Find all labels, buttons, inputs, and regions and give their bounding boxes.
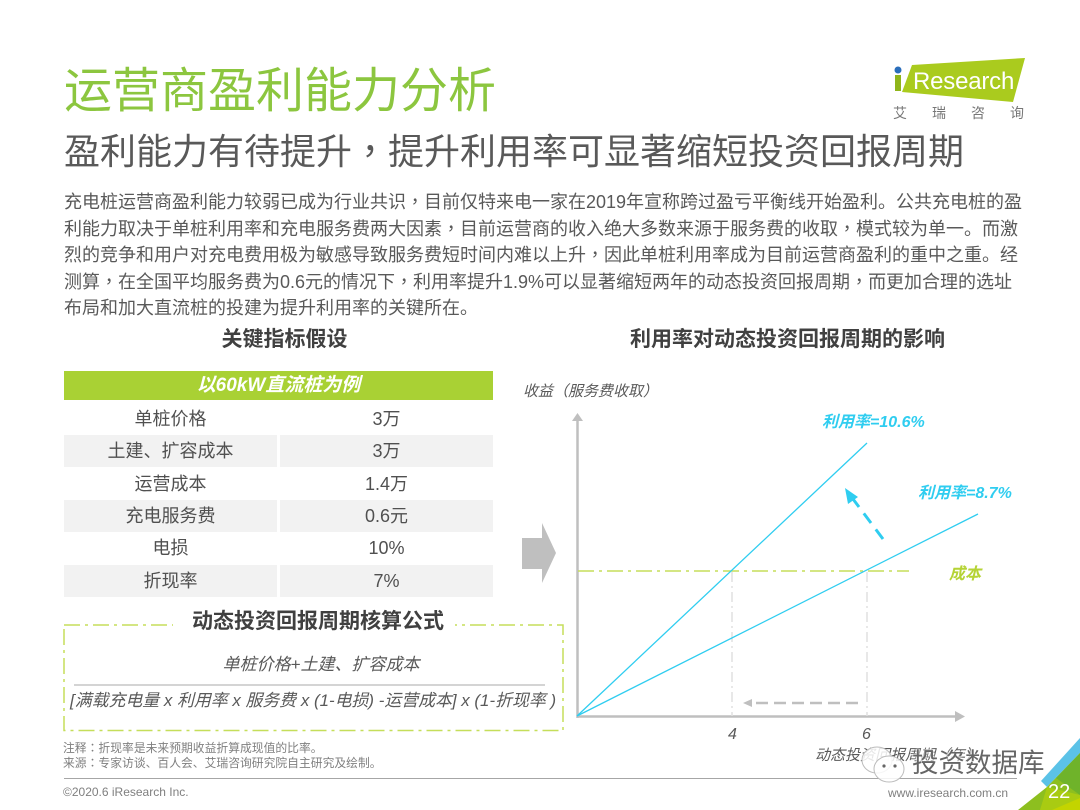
intro text block: 烈的竞争和用户对充电费用极为敏感导致服务费短时间内难以上升，因此单桩利用率成为目前运营商盈利的重中之重。经 [64, 245, 1018, 265]
table header [64, 371, 493, 400]
table: key assumptions: 3万 [372, 441, 400, 461]
label: 8.7%: 利用率=8.7% [918, 485, 1012, 502]
watermark text: 投资数据库 [912, 748, 1044, 778]
label: cost: 成本 [949, 566, 981, 583]
heading: chart title: 利用率对动态投资回报周期的影响 [630, 328, 945, 351]
y axis [572, 413, 583, 718]
tick 6: 6 [862, 726, 871, 743]
intro text block [64, 192, 1022, 318]
table header: 以60kW直流桩为例 [197, 375, 360, 396]
formula denominator: [满载充电量 x 利用率 x 服务费 x (1-电损) -运营成本] x (1-折现率 ) [70, 691, 556, 710]
notes [63, 741, 382, 770]
footer rule [64, 778, 1017, 779]
formula numerator: 单桩价格+土建、扩容成本 [223, 655, 419, 674]
table: key assumptions: 折现率 [144, 571, 198, 591]
corner decoration [1018, 738, 1080, 810]
line: 10.6% [577, 443, 867, 716]
guide lines [732, 572, 867, 716]
logo: iResearch [893, 58, 1049, 121]
heading: key assumptions: 关键指标假设 [222, 328, 348, 351]
table: key assumptions: 1.4万 [365, 474, 408, 494]
arrow: big grey [522, 523, 556, 583]
table: key assumptions: 7% [373, 571, 400, 591]
line: 8.7% [577, 514, 978, 716]
formula heading: 动态投资回报周期核算公式 [192, 610, 444, 633]
table: key assumptions: 3万 [372, 409, 400, 429]
page number: 22 [1048, 781, 1070, 803]
url: www.iresearch.com.cn [888, 786, 1008, 800]
subtitle: 盈利能力有待提升，提升利用率可显著缩短投资回报周期 [64, 131, 964, 172]
logo: iResearch: Research [913, 68, 1014, 95]
tick 4: 4 [728, 726, 737, 743]
table: key assumptions: 电损 [152, 538, 188, 558]
arrow: dashed cyan [845, 488, 883, 539]
table: key assumptions: 单桩价格 [134, 409, 206, 429]
intro text block: 充电桩运营商盈利能力较弱已成为行业共识，目前仅特来电一家在2019年宣称跨过盈亏平衡线开始盈利。公共充电桩的盈 [64, 192, 1022, 212]
label: 10.6%: 利用率=10.6% [822, 414, 925, 431]
chart: utilization vs payback [572, 413, 978, 722]
intro text block: 测算，在全国平均服务费为0.6元的情况下，利用率提升1.9%可以显著缩短两年的动态投资回报周期，而更加合理的选址 [64, 272, 1012, 292]
y axis label: 收益（服务费收取） [523, 383, 658, 400]
table: key assumptions: 0.6元 [365, 506, 408, 526]
intro text block: 布局和加大直流桩的投建为提升利用率的关键所在。 [64, 298, 478, 318]
watermark: wechat icon [862, 746, 904, 782]
notes: 来源：专家访谈、百人会、艾瑞咨询研究院自主研究及绘制。 [63, 756, 382, 770]
cost line [578, 570, 909, 572]
notes: 注释：折现率是未来预期收益折算成现值的比率。 [63, 741, 323, 755]
x axis [577, 711, 965, 722]
table: key assumptions: 土建、扩容成本 [108, 441, 234, 461]
intro text block: 利能力取决于单桩利用率和充电服务费两大因素，目前运营商的收入绝大多数来源于服务费的收取，模式较为单一。而激 [64, 218, 1018, 238]
formula panel [63, 610, 564, 732]
table: key assumptions: 充电服务费 [126, 506, 216, 526]
x axis label: 动态投资回报周期（年） [815, 747, 980, 764]
table: key assumptions [64, 371, 493, 597]
title: 运营商盈利能力分析 [64, 65, 496, 118]
arrow: dashed grey [743, 699, 858, 707]
logo: iResearch: 艾瑞咨询 [893, 105, 1049, 121]
table: key assumptions: 10% [368, 538, 405, 558]
table: key assumptions: 运营成本 [134, 474, 206, 494]
copyright: ©2020.6 iResearch Inc. [63, 785, 189, 799]
